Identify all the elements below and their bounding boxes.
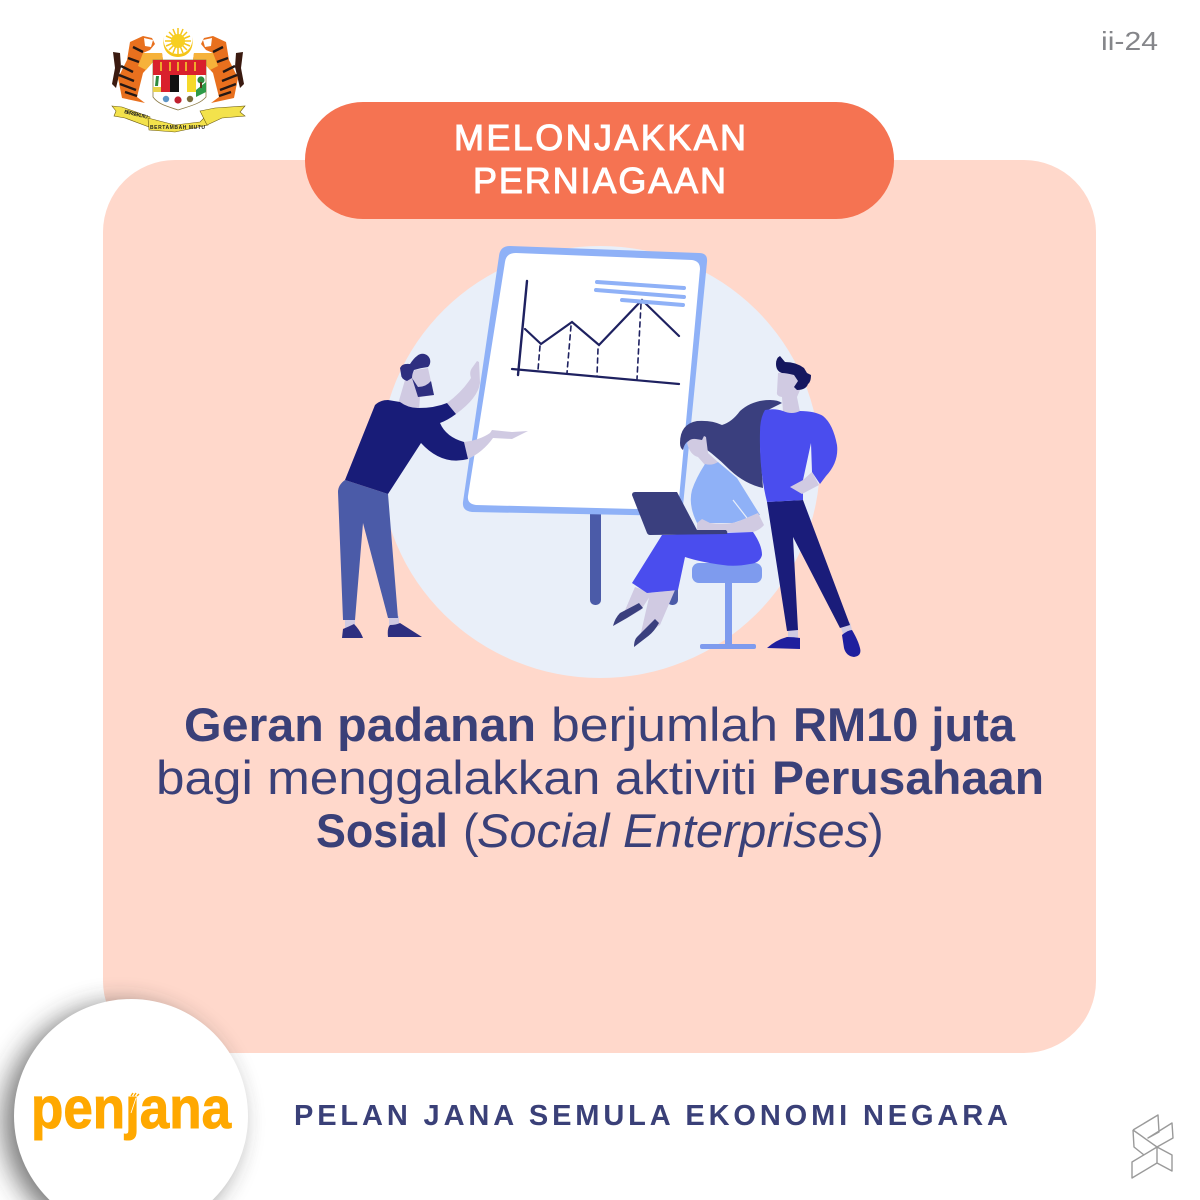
main description text: berjumlah	[551, 698, 778, 751]
man left: presenter	[338, 354, 528, 638]
main description text: Sosial	[316, 804, 448, 857]
heading text: PERNIAGAAN	[473, 160, 726, 201]
woman with laptop	[613, 400, 782, 647]
crest: right tiger	[193, 36, 244, 103]
crest: shield	[153, 60, 206, 110]
icon: outline geometric logo	[1132, 1115, 1173, 1178]
main description text: bagi menggalakkan aktiviti	[156, 751, 757, 804]
stool	[692, 563, 762, 649]
crest: left tiger	[112, 36, 163, 103]
main description text: Social Enterprises	[477, 804, 869, 857]
main description text: RM10 juta	[793, 698, 1016, 751]
main description text: Geran padanan	[184, 698, 536, 751]
heading text	[454, 117, 746, 201]
heading pill	[305, 102, 894, 219]
main description text: (	[463, 804, 479, 857]
crest: motto ribbon	[112, 106, 245, 132]
penjana wordmark: penjana	[31, 1076, 232, 1141]
crest: motto ribbon: BERSEKUTU	[124, 109, 149, 121]
presentation board	[463, 246, 707, 516]
man right: standing	[760, 356, 860, 657]
background circle	[380, 246, 820, 678]
chart legend lines	[596, 282, 684, 305]
illustration: people presenting at a chart board	[338, 246, 860, 678]
page number: ii-24	[1101, 26, 1158, 56]
crest: sun and crescent	[163, 28, 193, 57]
main description text: )	[868, 804, 884, 857]
main description text	[156, 698, 1044, 857]
board stand	[590, 505, 601, 605]
crest: motto ribbon: BERTAMBAH MUTU	[150, 125, 205, 131]
heading text: MELONJAKKAN	[454, 117, 746, 158]
icon: Malaysian coat of arms	[112, 28, 245, 132]
penjana wordmark	[34, 1092, 232, 1140]
line chart on board	[512, 281, 679, 384]
panel: main peach card	[103, 160, 1096, 1053]
penjana logo badge	[3, 999, 248, 1200]
footer tagline: PELAN JANA SEMULA EKONOMI NEGARA	[294, 1100, 1008, 1132]
main description text: Perusahaan	[772, 751, 1044, 804]
